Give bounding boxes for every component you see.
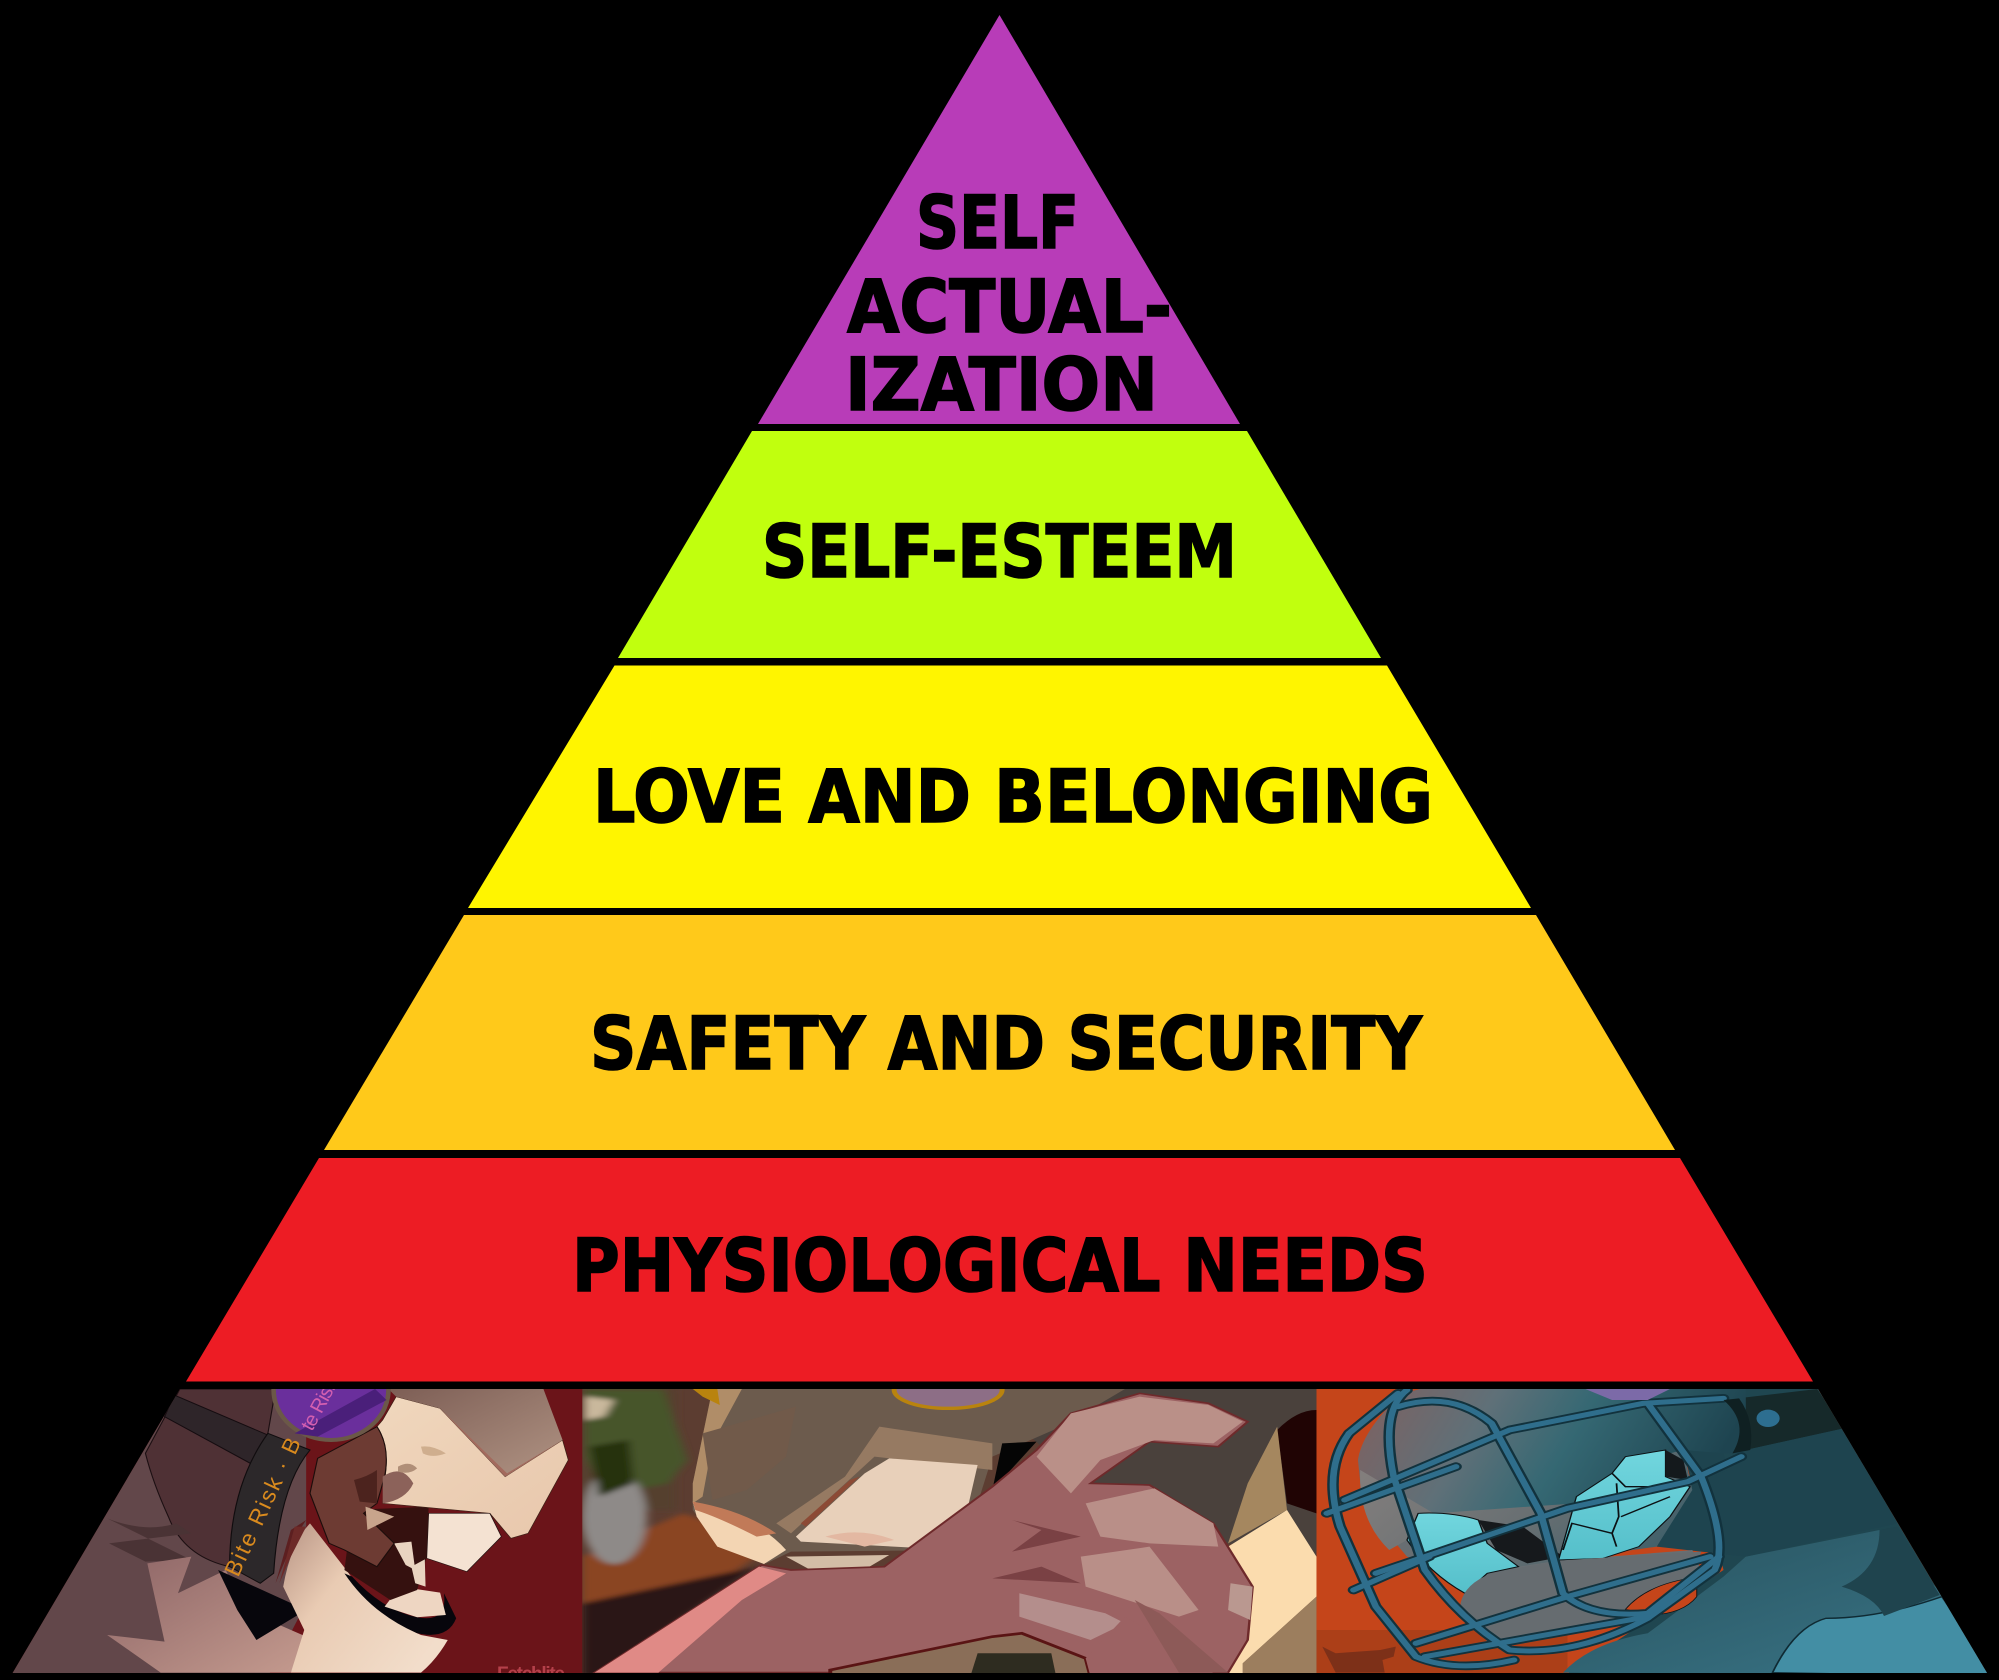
label: self actualization [845, 181, 1172, 428]
label: love and belonging: LOVE AND BELONGING [593, 755, 1433, 840]
panel: rodent biting hand [570, 1372, 1319, 1677]
orange tier shape [324, 915, 1675, 1150]
goggles text: te Risk [297, 1374, 343, 1434]
purple tier shape [758, 15, 1240, 424]
label: self-esteem: SELF-ESTEEM [762, 510, 1237, 595]
base tier: three illustrated panels [12, 1389, 1987, 1673]
lime tier shape [618, 431, 1381, 658]
collar text: Bite Risk · B [219, 1433, 306, 1580]
label: safety and security: SAFETY AND SECURITY [590, 1002, 1423, 1087]
label: physiological needs: PHYSIOLOGICAL NEEDS [572, 1224, 1428, 1309]
red tier shape [186, 1158, 1813, 1382]
label: self actualization: ACTUAL- [847, 265, 1172, 350]
tier: self-actualization [758, 15, 1240, 428]
tier: love and belonging [468, 666, 1531, 908]
panel: caged muzzle in teal [1316, 1387, 1999, 1677]
tier: self-esteem [618, 431, 1381, 658]
label: self actualization: SELF [916, 181, 1079, 266]
tier: safety and security [324, 915, 1675, 1150]
label: self actualization: IZATION [845, 343, 1158, 428]
panel: muzzle with bite risk collar [12, 1389, 582, 1673]
yellow tier shape [468, 666, 1531, 908]
tier: physiological needs [186, 1158, 1813, 1382]
